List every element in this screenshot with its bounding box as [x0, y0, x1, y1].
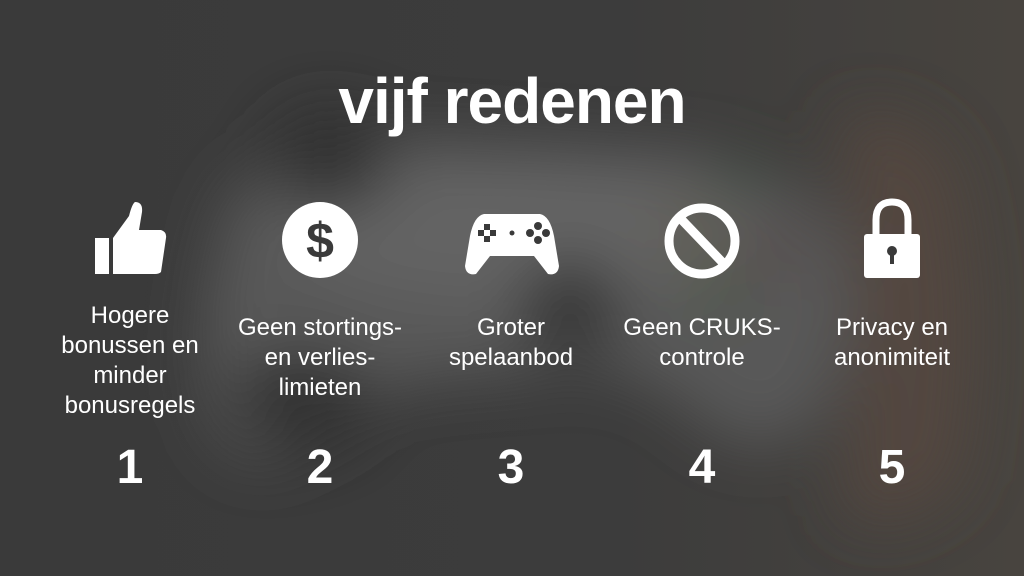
text: reason 2: Geen stortings-	[238, 314, 402, 341]
text: reason 5	[834, 314, 950, 371]
icon: padlock	[864, 198, 920, 278]
icon: prohibited sign	[664, 204, 740, 278]
number 2: 2	[307, 441, 333, 494]
text: reason 4	[623, 314, 781, 371]
text: reason 1: minder	[93, 362, 167, 389]
text: reason 1: bonusregels	[65, 392, 195, 419]
text: reason 3: Groter	[477, 314, 545, 341]
text: reason 1: bonussen en	[61, 332, 199, 359]
text: reason 5: anonimiteit	[834, 344, 950, 371]
text: reason 5: Privacy en	[836, 314, 948, 341]
number 5: 5	[879, 441, 905, 494]
text: reason 1	[61, 302, 199, 419]
text: reason 2: limieten	[279, 374, 361, 401]
number 1: 1	[117, 441, 143, 494]
text: reason 3	[449, 314, 573, 371]
title: vijf redenen	[338, 65, 686, 137]
icon: thumbs up	[95, 202, 166, 274]
text: reason 2: en verlies-	[265, 344, 375, 371]
text: reason 3: spelaanbod	[449, 344, 573, 371]
text: reason 4: controle	[659, 344, 745, 371]
icon: dollar coin	[282, 202, 358, 278]
icon: gamepad	[465, 214, 559, 274]
text: reason 4: Geen CRUKS-	[623, 314, 781, 341]
number 3: 3	[498, 441, 524, 494]
icon: dollar coin: $	[306, 213, 334, 269]
text: reason 1: Hogere	[91, 302, 169, 329]
text: reason 2	[238, 314, 402, 401]
number 4: 4	[689, 441, 715, 494]
